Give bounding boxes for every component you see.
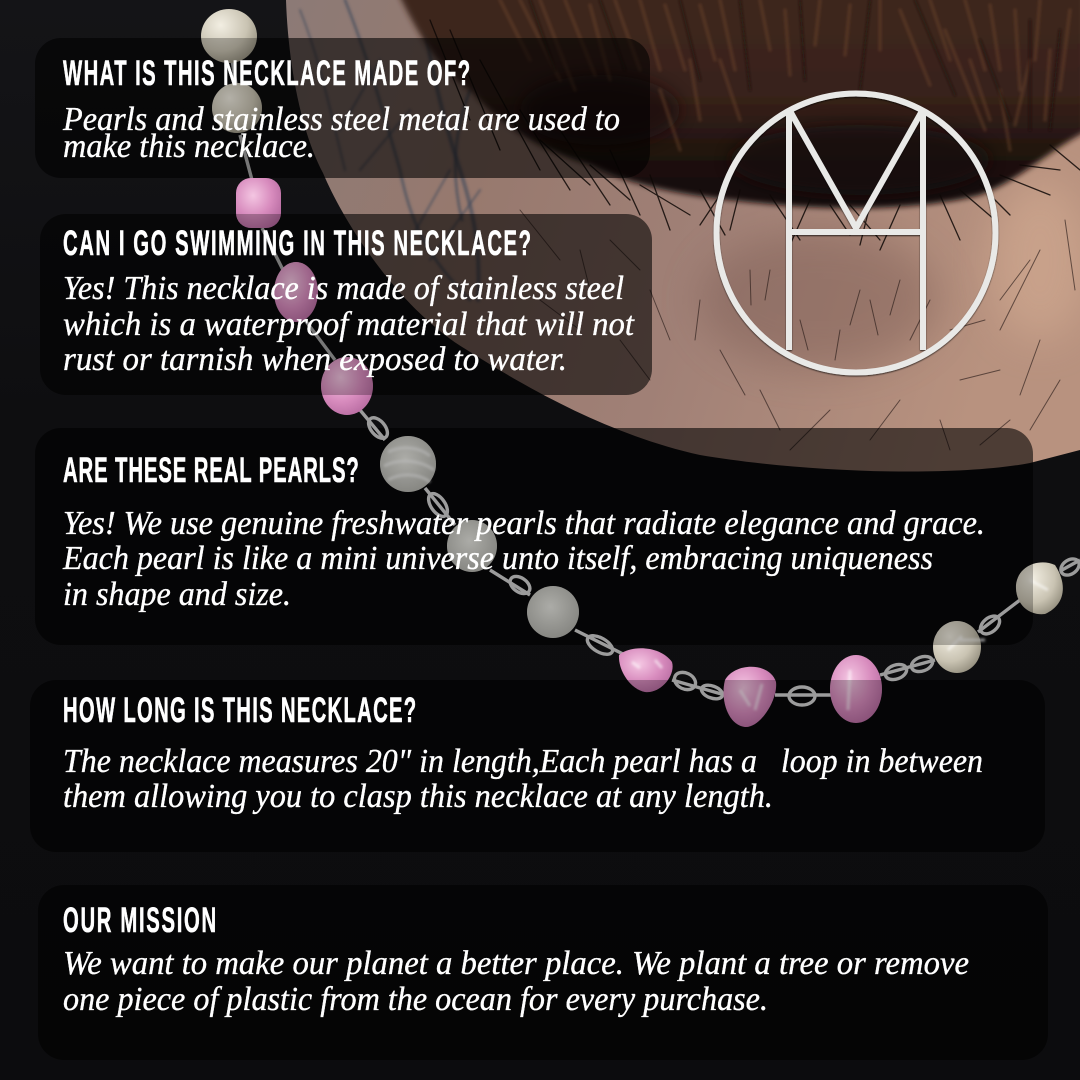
text block: made of answer: Pearls and stainless steel metal are used to xyxy=(62,101,620,138)
text block: real pearls answer: in shape and size. xyxy=(63,576,291,613)
pearls xyxy=(201,9,1063,727)
panel: can I go swimming xyxy=(40,214,652,395)
panel: how long is this necklace xyxy=(30,680,1045,852)
panel: what is this necklace made of xyxy=(35,38,650,178)
photo: beard xyxy=(392,0,1080,250)
heading: swimming: CAN I GO SWIMMING IN THIS NECKLACE? xyxy=(63,224,531,264)
text block: swimming answer: rust or tarnish when exposed to water. xyxy=(63,341,567,378)
text block: made of answer xyxy=(62,101,620,165)
text block: how long answer: them allowing you to clasp this necklace at any length. xyxy=(63,778,773,815)
photo: neck tattoo xyxy=(300,0,480,300)
panel tint over pearls xyxy=(201,38,1033,727)
text block: swimming answer xyxy=(63,270,635,378)
text block: real pearls answer: Yes! We use genuine freshwater pearls that radiate elegance and grace. xyxy=(63,505,985,542)
heading: made of: WHAT IS THIS NECKLACE MADE OF? xyxy=(63,54,470,94)
heading: our mission: OUR MISSION xyxy=(63,901,216,941)
text block: real pearls answer: Each pearl is like a mini universe unto itself, embracing uniqueness xyxy=(62,540,933,577)
panel: our mission xyxy=(38,885,1048,1060)
text block: swimming answer: which is a waterproof material that will not xyxy=(63,306,635,343)
necklace chain xyxy=(232,60,1080,705)
icon: circular MH logo xyxy=(716,94,996,372)
text block: how long answer: The necklace measures 20" in length,Each pearl has a loop in between xyxy=(63,743,983,780)
photo: neck skin xyxy=(286,0,1080,472)
text block: real pearls answer xyxy=(62,505,985,613)
text block: mission: one piece of plastic from the ocean for every purchase. xyxy=(63,981,768,1018)
pearl ribs and highlights xyxy=(384,448,1048,710)
text block: mission xyxy=(63,945,969,1018)
text block: swimming answer: Yes! This necklace is made of stainless steel xyxy=(63,270,624,307)
heading: real pearls: ARE THESE REAL PEARLS? xyxy=(63,451,359,491)
heading: how long: HOW LONG IS THIS NECKLACE? xyxy=(63,691,416,731)
text block: made of answer: make this necklace. xyxy=(63,128,315,165)
text block: mission: We want to make our planet a better place. We plant a tree or remove xyxy=(63,945,969,982)
panel: are these real pearls xyxy=(35,428,1033,645)
text block: how long answer xyxy=(63,743,983,815)
photo: stubble xyxy=(520,210,1075,450)
